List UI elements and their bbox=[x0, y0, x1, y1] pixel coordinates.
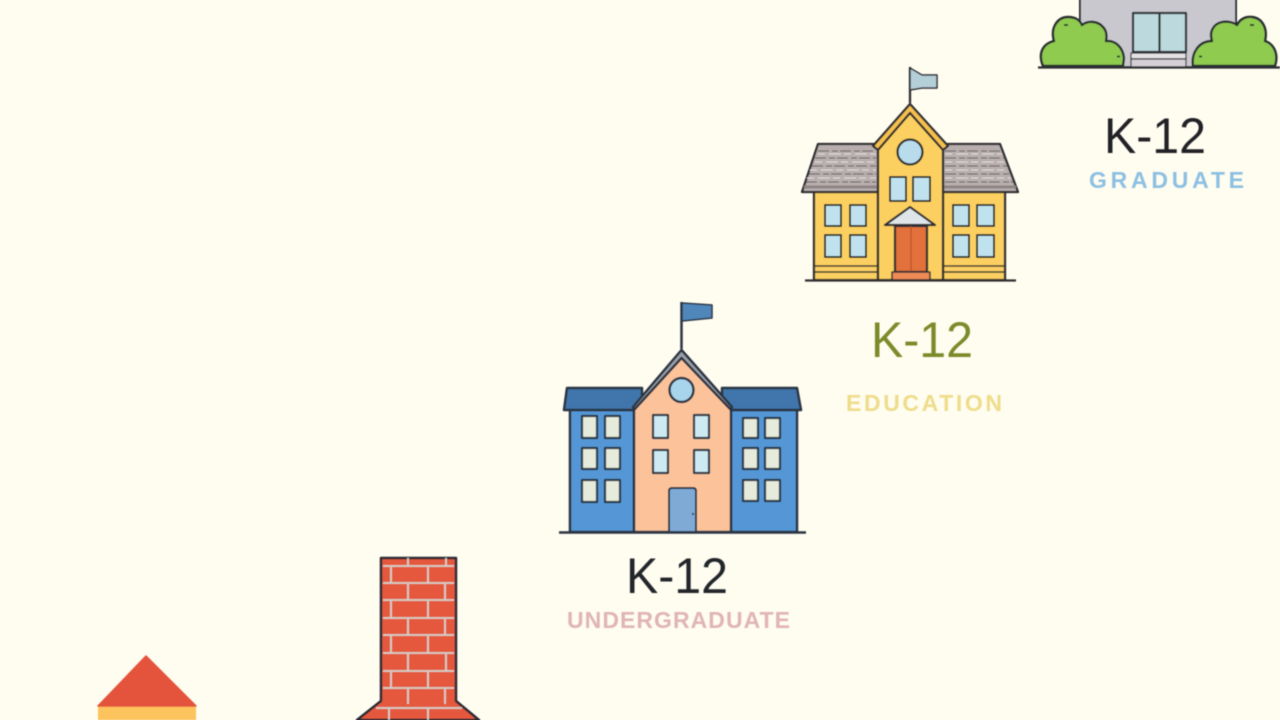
centre block bbox=[634, 354, 731, 532]
right bush bbox=[1193, 17, 1276, 66]
wing roofs bbox=[564, 388, 642, 410]
label: K-12 education: K-12 bbox=[871, 312, 973, 368]
icon: yellow school building bbox=[802, 67, 1018, 280]
label: K-12 undergraduate bbox=[567, 548, 790, 633]
tower bbox=[878, 110, 943, 280]
right wing bbox=[731, 410, 797, 532]
left bush bbox=[1041, 17, 1124, 66]
icon: brick chimney bbox=[357, 558, 479, 720]
gable trim bbox=[633, 350, 732, 410]
portico bbox=[885, 207, 935, 225]
windows bbox=[825, 177, 994, 257]
label: K-12 graduate: GRADUATE bbox=[1089, 167, 1244, 193]
flag bbox=[910, 67, 937, 103]
ground line bbox=[1038, 66, 1280, 69]
wings bbox=[814, 192, 878, 280]
label: K-12 graduate bbox=[1089, 108, 1244, 193]
label: K-12 education: EDUCATION bbox=[846, 390, 1002, 416]
step bbox=[892, 272, 930, 280]
icon: blue and peach school building bbox=[559, 302, 806, 532]
ground line bbox=[805, 279, 1016, 282]
steps bbox=[1131, 53, 1186, 67]
label: K-12 education bbox=[846, 312, 1002, 416]
windows bbox=[582, 416, 780, 502]
icon: small house with red roof bbox=[98, 656, 196, 720]
ground line bbox=[559, 531, 806, 534]
label: K-12 undergraduate: K-12 bbox=[626, 548, 728, 604]
door bbox=[669, 488, 696, 532]
left wing bbox=[570, 410, 634, 532]
round window bbox=[670, 378, 694, 402]
round window bbox=[898, 140, 922, 164]
flag bbox=[682, 302, 712, 349]
label: K-12 graduate: K-12 bbox=[1104, 108, 1206, 164]
door bbox=[895, 226, 927, 272]
gable trim bbox=[873, 104, 948, 150]
shingled roofs bbox=[802, 144, 1018, 192]
glass door bbox=[1133, 13, 1186, 52]
icon: grey building with bushes bbox=[1038, 0, 1280, 68]
wing base bands bbox=[814, 266, 1005, 272]
label: K-12 undergraduate: UNDERGRADUATE bbox=[567, 607, 790, 633]
wall bbox=[1080, 0, 1236, 67]
